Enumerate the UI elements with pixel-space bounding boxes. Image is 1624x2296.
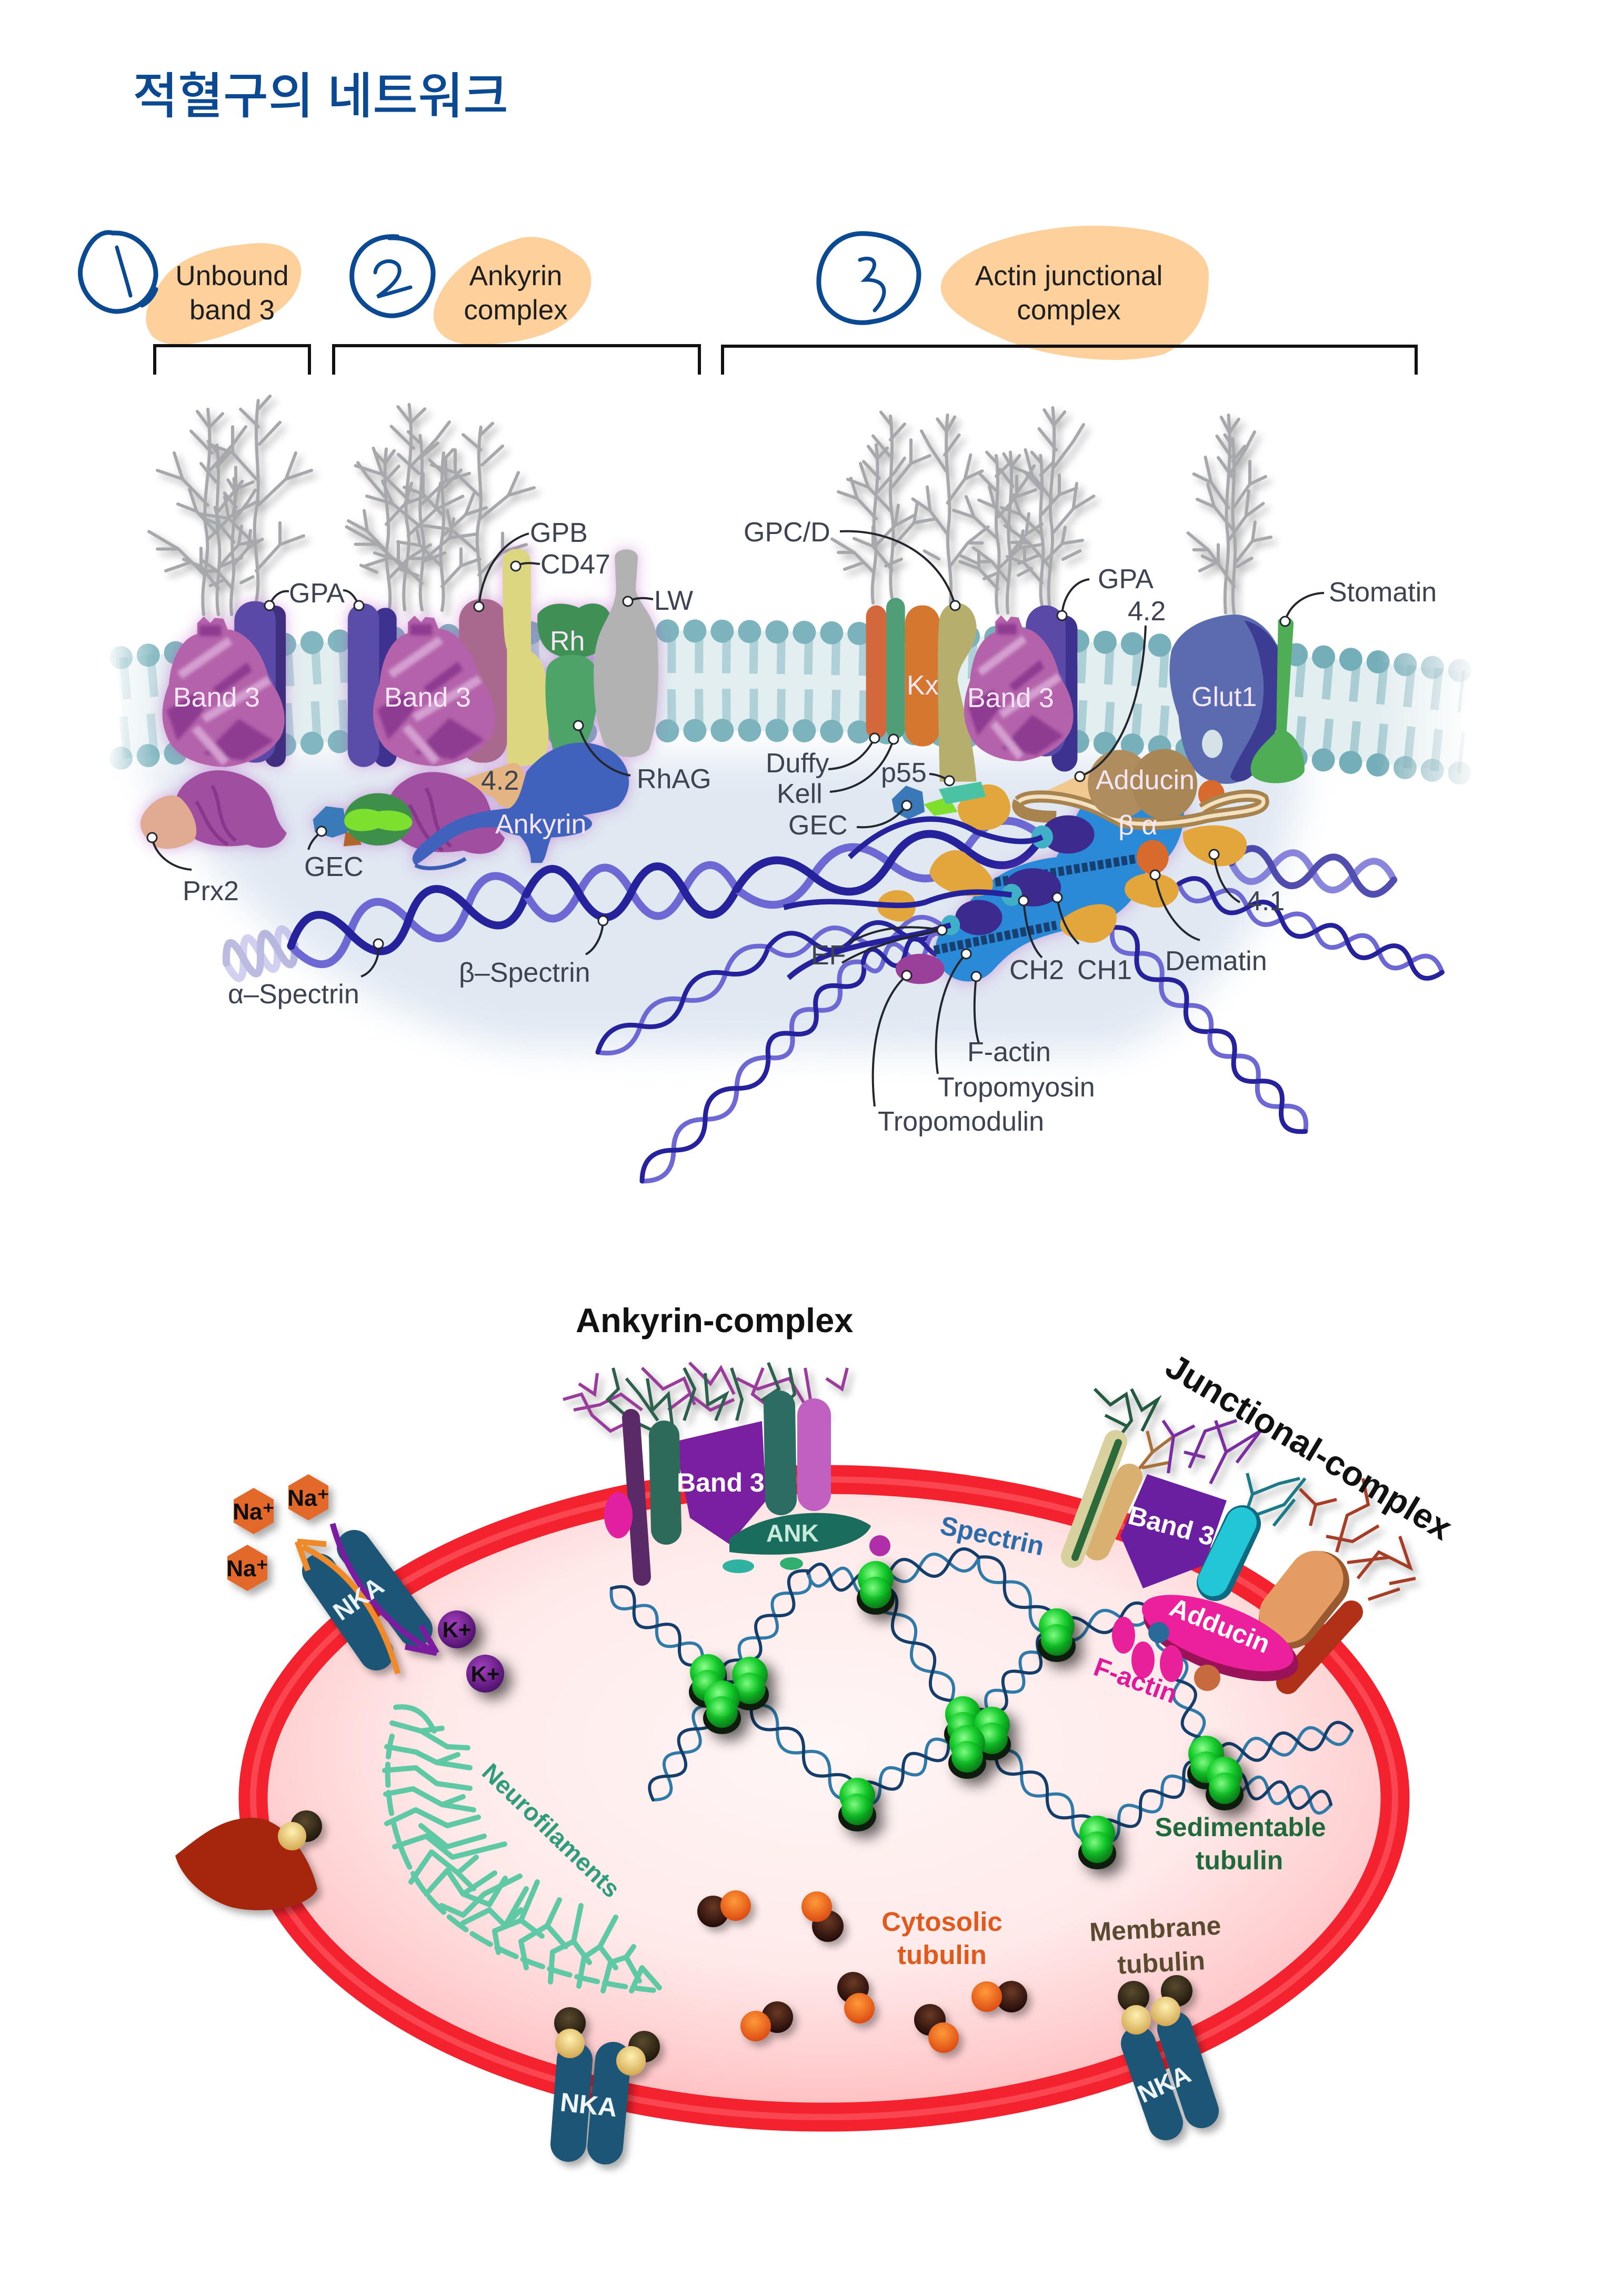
label: RhAG: RhAG [637, 764, 711, 794]
teal capsule [664, 1436, 666, 1529]
helix overlay [784, 819, 1042, 978]
label: Kell: Kell [777, 779, 823, 809]
label: 4.1: 4.1 [1247, 886, 1285, 917]
band 3 left [162, 617, 285, 767]
label: beta alpha: β α [1118, 810, 1157, 841]
label: Ankyrin complex: complex [464, 295, 568, 326]
ankyrin [413, 742, 629, 865]
sedimentable tubulin nodes [689, 1561, 1244, 1869]
dark red capsule [1288, 1612, 1351, 1683]
highlight: unbound band 3 [146, 243, 301, 345]
bracket 2 [334, 346, 699, 375]
label: Unbound band 3: band 3 [189, 295, 275, 326]
cell body [253, 1479, 1395, 2117]
Na+ text: Na⁺ [233, 1499, 275, 1525]
orange sphere [1194, 1665, 1220, 1691]
cytosolic tubulin dimers [697, 1890, 1027, 2053]
LW [594, 549, 658, 757]
Glut1 hole [1202, 730, 1222, 758]
band 3 lower left [175, 770, 287, 848]
Glut1 dark side [1230, 620, 1287, 782]
glycans [563, 1363, 847, 1436]
label: Ankyrin complex: Ankyrin [469, 260, 562, 291]
small green ellipse [780, 1557, 803, 1570]
label: Neurofilaments: Neurofilaments [477, 1758, 626, 1903]
Rh [537, 603, 612, 658]
highlight: ankyrin complex [434, 237, 591, 345]
neurofilaments [385, 1707, 659, 1991]
glycan trees [149, 396, 1271, 615]
label: Band 3: Band 3 [967, 683, 1054, 713]
label: Sedimentable tubulin: tubulin [1196, 1846, 1283, 1875]
CD47 [503, 549, 548, 766]
band 3 right [964, 616, 1074, 761]
blue sphere [1148, 1622, 1169, 1643]
band 3 pentagon [1120, 1474, 1227, 1588]
magenta sphere [869, 1535, 890, 1556]
cyan capsule [1213, 1523, 1242, 1583]
label: Sedimentable tubulin: Sedimentable [1155, 1812, 1326, 1842]
label: Membrane tubulin: Membrane [1089, 1911, 1222, 1947]
label: Unbound band 3: Unbound [175, 260, 289, 291]
label: Kx: Kx [907, 670, 939, 701]
membrane highlight [253, 1479, 1395, 2117]
label: CH1: CH1 [1077, 955, 1132, 985]
handwritten number 3 [819, 234, 919, 323]
GPB [459, 599, 507, 763]
handwritten number 2 [352, 237, 433, 316]
ankyrin body behind label [496, 810, 592, 838]
Na+ ion [288, 1474, 328, 1520]
Stomatin [1251, 617, 1305, 783]
ankyrin tail [415, 859, 466, 868]
Glut1 [1169, 615, 1287, 784]
tan capsule [1097, 1477, 1129, 1547]
label: Duffy: Duffy [766, 748, 829, 779]
label: p55: p55 [881, 758, 927, 788]
lime protein [344, 809, 413, 831]
label: Cytosolic tubulin: tubulin [897, 1940, 987, 1970]
label: GPC/D: GPC/D [744, 517, 830, 548]
label: Prx2: Prx2 [183, 876, 239, 907]
band 3 lower second [387, 772, 505, 854]
Na+ text: Na⁺ [226, 1556, 268, 1582]
glycans [1095, 1389, 1416, 1599]
label: Cytosolic tubulin: Cytosolic [881, 1907, 1003, 1937]
orange caps [1137, 840, 1169, 874]
title: 적혈구의 네트워크 [133, 56, 508, 128]
NKA pump bottom [554, 2007, 660, 2147]
label: Membrane tubulin: tubulin [1117, 1946, 1206, 1980]
label: GEC: GEC [304, 852, 364, 882]
label: alpha spectrin: α–Spectrin [228, 979, 359, 1010]
adducin ellipse [1133, 1579, 1308, 1698]
label: F-actin: F-actin [967, 1037, 1051, 1068]
label: ANK: ANK [766, 1519, 819, 1547]
label: LW: LW [654, 586, 693, 616]
label: GPA: GPA [1098, 564, 1154, 595]
green striped capsule [1072, 1442, 1118, 1557]
label: Actin junctional complex: Actin junctional [975, 260, 1162, 291]
teal capsule 2 [779, 1406, 781, 1499]
label: F-actin: F-actin [1090, 1652, 1181, 1709]
Duffy [866, 606, 887, 739]
panel: membrane model illustration [121, 396, 1463, 1189]
label: beta spectrin: β–Spectrin [459, 958, 590, 988]
GPA dimer 1 [234, 601, 286, 767]
spectrin helices [222, 814, 1446, 1189]
spectrin network [605, 1546, 1354, 1847]
label: GPB: GPB [530, 518, 588, 548]
Prx2 [141, 795, 196, 849]
label: CD47: CD47 [540, 549, 610, 580]
label: Spectrin: Spectrin [938, 1510, 1047, 1561]
label: Band 3: Band 3 [677, 1468, 765, 1497]
RhAG [545, 654, 598, 750]
Na+ ions [226, 1474, 329, 1591]
K+ text: K+ [443, 1617, 471, 1642]
protein 4.2 [464, 763, 526, 808]
label: Glut1: Glut1 [1191, 682, 1257, 712]
label: Adducin: Adducin [1096, 765, 1195, 795]
protein labels [173, 517, 1437, 1137]
label: Tropomodulin: Tropomodulin [878, 1106, 1044, 1137]
bracket 3 [723, 346, 1416, 375]
liver-shaped protein [175, 1810, 322, 1910]
pink ellipse [604, 1492, 633, 1538]
handwritten number 1 [80, 233, 156, 311]
leader dots [147, 561, 1290, 981]
bracket 1 [155, 346, 309, 375]
LW mottling [614, 623, 635, 741]
protein 4.2 wedge [1045, 771, 1099, 802]
purple arrow [333, 1524, 437, 1653]
orange cap 2 [1198, 780, 1225, 808]
ankyrin complex [563, 1363, 890, 1577]
label: 4.2: 4.2 [1128, 596, 1166, 627]
tan large capsule [1287, 1578, 1319, 1618]
junctional complex [1072, 1389, 1416, 1698]
NKA pump right [1118, 1975, 1201, 2123]
left proteins: band 3 and ankyrin complexes [141, 549, 658, 868]
label: NKA: NKA [1134, 2060, 1195, 2109]
leader lines [152, 531, 1324, 1106]
K+ text: K+ [471, 1661, 499, 1686]
K+ ions [438, 1610, 504, 1693]
label: Adducin: Adducin [1166, 1592, 1274, 1659]
label: Actin junctional complex: complex [1017, 295, 1121, 326]
GPA dimer 2 [348, 603, 397, 767]
band 3 second [373, 616, 495, 766]
label: Dematin: Dematin [1165, 946, 1267, 976]
Na+ ion [234, 1488, 274, 1534]
Na+ text: Na⁺ [287, 1485, 329, 1511]
band 3 pentagon [675, 1421, 766, 1544]
dark purple capsule [631, 1418, 642, 1577]
label: Ankyrin: Ankyrin [495, 809, 586, 840]
GEC blue [313, 806, 348, 838]
Na+ ion [227, 1545, 267, 1591]
ANK lens [729, 1513, 871, 1555]
middle and right proteins [784, 598, 1305, 984]
label: Ankyrin-complex: Ankyrin-complex [576, 1301, 853, 1340]
GPA [1026, 606, 1077, 771]
label: Band 3: Band 3 [384, 682, 471, 713]
lipid bilayer [121, 631, 1463, 773]
GPC/D [938, 603, 976, 782]
label: NKA: NKA [559, 2087, 618, 2122]
highlight: actin junctional complex [941, 226, 1209, 360]
label: CH2: CH2 [1009, 955, 1064, 985]
EF dark domains [955, 815, 1095, 935]
tropomodulin [896, 954, 945, 984]
label: Band 3: Band 3 [173, 682, 260, 713]
panel: red blood cell network illustration [175, 1301, 1459, 2147]
pink capsule [797, 1415, 831, 1494]
tropomyosin [934, 857, 1146, 950]
label: Tropomyosin: Tropomyosin [938, 1072, 1095, 1103]
cytoskeleton background [137, 758, 1305, 1052]
label: GPA: GPA [289, 578, 345, 609]
label: 4.2: 4.2 [481, 766, 519, 796]
label: GEC: GEC [788, 810, 848, 841]
GEC green [344, 793, 413, 845]
F-actin spheres [1112, 1617, 1183, 1682]
teal EF heads [941, 825, 1053, 935]
label: Band 3: Band 3 [1125, 1501, 1218, 1552]
GEC complex [892, 782, 986, 819]
Kell [886, 598, 905, 739]
blue actin region [936, 797, 1184, 981]
label: NKA: NKA [328, 1572, 389, 1626]
NKA pump upper left [297, 1524, 437, 1674]
label: Rh: Rh [550, 626, 585, 657]
panel: complex headers [80, 226, 1416, 375]
label: Stomatin: Stomatin [1329, 577, 1437, 608]
orange arrow [297, 1542, 398, 1674]
label: EF: EF [811, 940, 846, 971]
small teal ellipse [723, 1559, 754, 1573]
adducin [1018, 749, 1264, 824]
orange actin caps [877, 784, 1247, 943]
Kx [905, 606, 940, 747]
label: Junctional-complex: Junctional-complex [1159, 1346, 1459, 1547]
brown band [344, 832, 362, 847]
